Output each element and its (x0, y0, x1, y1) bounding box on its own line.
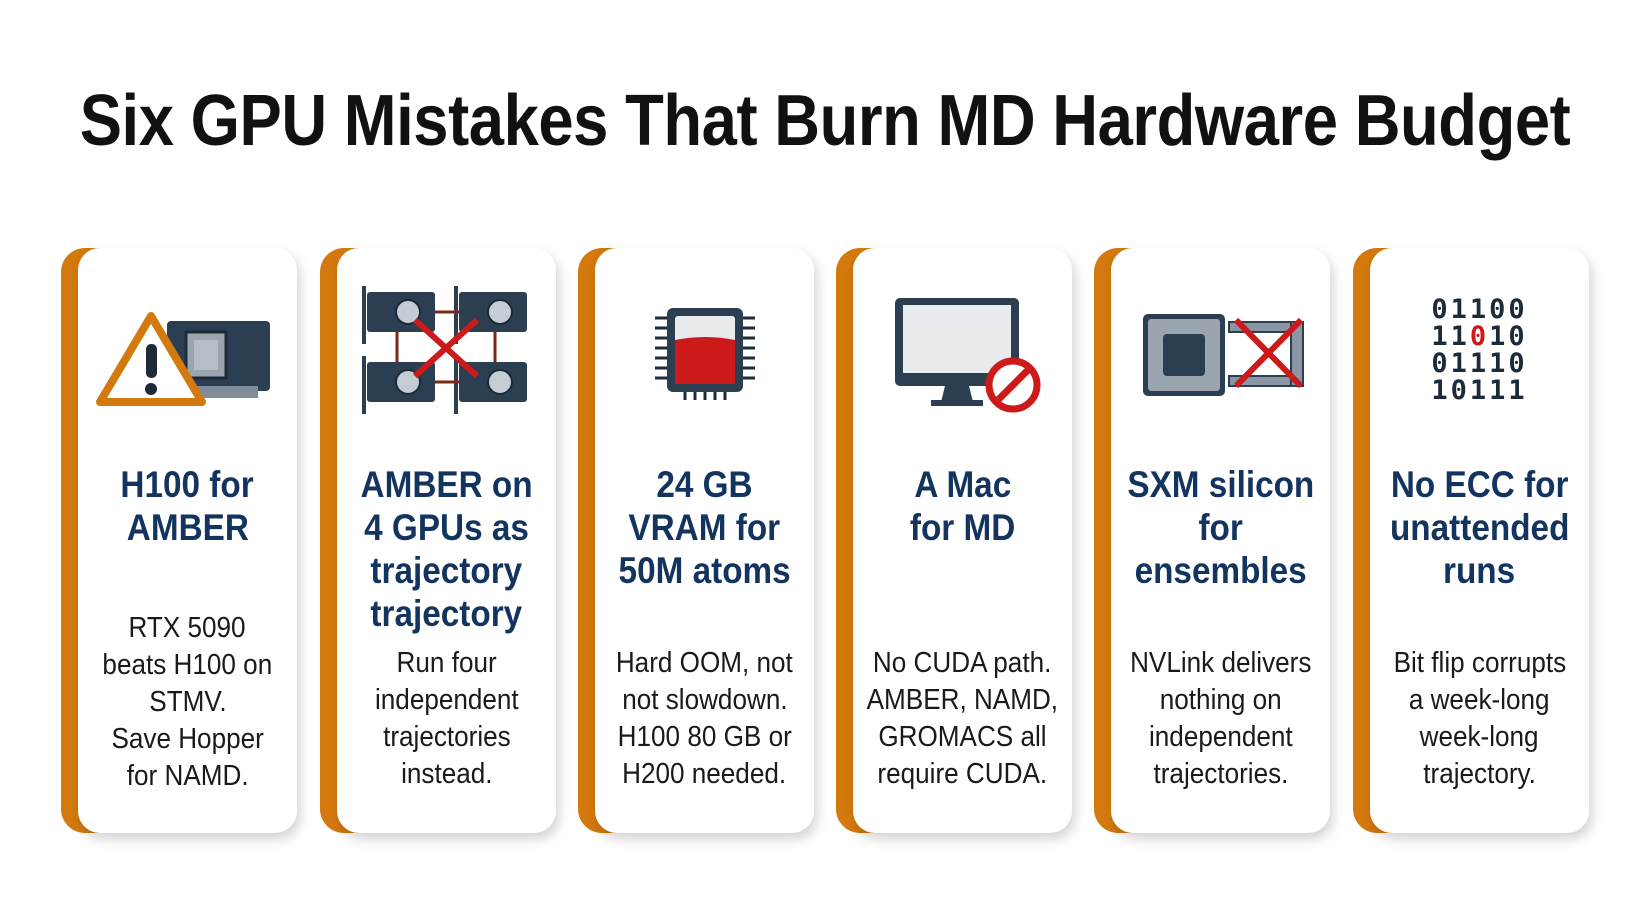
body text (1130, 647, 1311, 790)
panel: No ECC (1353, 248, 1597, 844)
heading: No ECC for (1391, 464, 1568, 505)
body text: Bit flip corrupts (1393, 647, 1566, 679)
body text (616, 647, 793, 790)
body text: for NAMD. (127, 760, 248, 792)
heading: 24 GB (656, 464, 753, 505)
body text: instead. (401, 758, 492, 790)
body text (103, 612, 272, 792)
body text: Hard OOM, not (616, 647, 793, 679)
body text (866, 647, 1058, 790)
heading: H100 for (121, 464, 254, 505)
icon: binary grid with flipped bit: 01100 (1431, 294, 1528, 325)
body text: H200 needed. (623, 758, 786, 790)
body text: STMV. (149, 686, 226, 718)
body text: nothing on (1160, 684, 1281, 716)
body text: H100 80 GB or (617, 721, 792, 753)
body text: NVLink delivers (1130, 647, 1311, 679)
heading (360, 464, 533, 634)
heading (121, 464, 254, 548)
heading: unattended (1390, 507, 1569, 548)
title: Six GPU Mistakes That Burn MD Hardware Budget (80, 81, 1570, 161)
heading: trajectory (371, 550, 522, 591)
heading: 4 GPUs as (364, 507, 529, 548)
icon: SXM module crossed (1143, 314, 1304, 396)
heading: for MD (910, 507, 1015, 548)
panel: A Mac for MD (836, 248, 1080, 844)
heading: AMBER (126, 507, 249, 548)
panel: 24 GB VRAM (578, 248, 822, 844)
body text: Run four (396, 647, 497, 679)
panel: H100 for AMBER (61, 248, 305, 844)
body text: AMBER, NAMD, (867, 684, 1058, 716)
icon: binary grid with flipped bit: 11010 (1431, 321, 1528, 352)
heading (1390, 464, 1569, 591)
icon: binary grid with flipped bit (1431, 294, 1528, 406)
body text: No CUDA path. (873, 647, 1052, 679)
body text: trajectory. (1423, 758, 1536, 790)
body text: beats H100 on (103, 649, 272, 681)
body text: GROMACS all (878, 721, 1047, 753)
icon: binary grid with flipped bit: 10111 (1431, 375, 1528, 406)
body text: trajectories. (1153, 758, 1288, 790)
body text: a week-long (1409, 684, 1550, 716)
heading: ensembles (1134, 550, 1307, 591)
heading: A Mac (914, 464, 1011, 505)
icon: memory chip filled red (655, 308, 755, 400)
body text: trajectories (383, 721, 510, 753)
icon: binary grid with flipped bit: 01110 (1431, 348, 1528, 379)
body text: Save Hopper (111, 723, 264, 755)
heading (618, 464, 791, 591)
heading (910, 464, 1015, 548)
heading: VRAM for (629, 507, 780, 548)
icon: monitor with prohibited sign (895, 298, 1040, 412)
body text: independent (1149, 721, 1292, 753)
heading: for (1198, 507, 1243, 548)
body text: not slowdown. (622, 684, 787, 716)
heading (1127, 464, 1314, 591)
heading: AMBER on (360, 464, 533, 505)
icon: four GPUs crossed (362, 286, 527, 414)
icon: warning + GPU (96, 312, 270, 406)
heading: SXM silicon (1127, 464, 1314, 505)
heading: 50M atoms (618, 550, 791, 591)
body text: RTX 5090 (129, 612, 246, 644)
body text (1393, 647, 1566, 790)
panel: SXM silicon (1094, 248, 1338, 844)
body text: week-long (1420, 721, 1539, 753)
body text: require CUDA. (878, 758, 1047, 790)
body text: independent (375, 684, 518, 716)
heading: runs (1443, 550, 1516, 591)
panel: AMBER on 4 GPUs (320, 248, 564, 844)
heading: trajectory (371, 593, 522, 634)
body text (375, 647, 518, 790)
